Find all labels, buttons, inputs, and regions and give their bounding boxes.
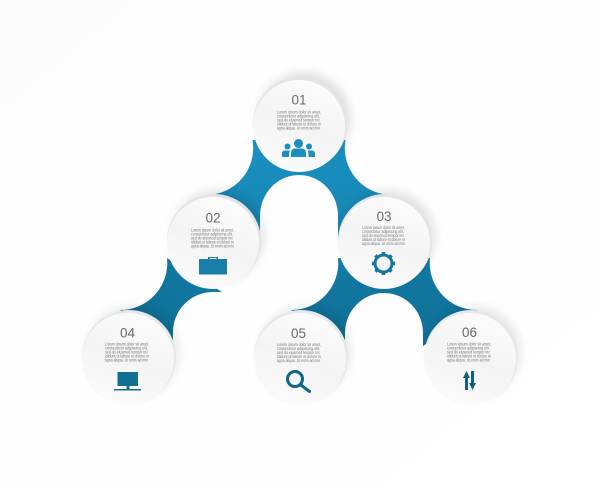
number 05: 05 — [291, 326, 306, 341]
text block 01: consectetur adipiscing elit, — [277, 114, 320, 118]
text block 03: Lorem ipsum dolor sit amet, — [362, 225, 405, 230]
connector: 03 to 05 and 06 — [291, 258, 477, 348]
text block 01 — [277, 110, 321, 130]
step 02 — [167, 190, 264, 289]
text block 02 — [191, 228, 234, 248]
text block 03: sed do eiusmod tempor inc — [362, 233, 405, 238]
step 04 — [82, 306, 179, 405]
step 06 — [424, 306, 521, 405]
icon: monitor — [114, 372, 141, 390]
text block 05: Lorem ipsum dolor sit amet, — [277, 342, 321, 347]
text block 06 — [447, 342, 491, 362]
text block 01: ididunt ut labore et dolore m — [277, 122, 321, 126]
text block 05: consectetur adipiscing elit, — [277, 346, 320, 351]
text block 04: ididunt ut labore et dolore m — [105, 354, 149, 358]
number 01: 01 — [291, 92, 307, 108]
text block 02: agna aliqua. Ut enim ad min — [191, 244, 234, 248]
text block 04 — [105, 342, 149, 362]
step 05 — [254, 306, 351, 405]
icon: gear — [372, 252, 395, 275]
text block 06: agna aliqua. Ut enim ad min — [447, 358, 490, 362]
icon: briefcase — [199, 257, 227, 274]
text block 04: agna aliqua. Ut enim ad min — [105, 358, 148, 362]
text block 03: consectetur adipiscing elit, — [362, 229, 404, 234]
text block 03 — [362, 225, 405, 246]
text block 04: sed do eiusmod tempor inc — [105, 350, 149, 354]
text block 06: Lorem ipsum dolor sit amet, — [447, 342, 491, 346]
icon: up and down arrows — [463, 371, 476, 390]
text block 02: Lorem ipsum dolor sit amet, — [191, 228, 234, 232]
text block 03: agna aliqua. Ut enim ad min — [362, 241, 405, 246]
text block 06: ididunt ut labore et dolore m — [447, 354, 491, 358]
text block 05 — [277, 342, 321, 363]
text block 06: sed do eiusmod tempor inc — [447, 350, 491, 354]
icon: people — [282, 139, 315, 157]
number 02: 02 — [205, 210, 221, 226]
connector: 02 to 04 — [120, 258, 222, 348]
step 01 — [253, 73, 350, 172]
connector: 01 to 02 and 03 — [206, 140, 392, 240]
text block 06: consectetur adipiscing elit, — [447, 346, 490, 350]
text block 02: ididunt ut labore et dolore m — [191, 240, 234, 244]
text block 04: consectetur adipiscing elit, — [105, 346, 148, 350]
text block 05: sed do eiusmod tempor inc — [277, 350, 321, 355]
text block 05: agna aliqua. Ut enim ad min — [277, 358, 320, 363]
text block 02: consectetur adipiscing elit, — [191, 232, 233, 236]
step 03 — [338, 190, 435, 289]
number 04: 04 — [120, 326, 135, 340]
text block 01: agna aliqua. Ut enim ad min — [277, 126, 320, 130]
text block 02: sed do eiusmod tempor inc — [191, 236, 234, 240]
icon: magnifier — [288, 372, 310, 392]
text block 04: Lorem ipsum dolor sit amet, — [105, 342, 149, 346]
number 03: 03 — [376, 209, 392, 224]
number 06: 06 — [462, 325, 477, 340]
text block 05: ididunt ut labore et dolore m — [277, 354, 321, 359]
text block 01: sed do eiusmod tempor inc — [277, 118, 321, 122]
text block 03: ididunt ut labore et dolore m — [362, 237, 405, 242]
text block 01: Lorem ipsum dolor sit amet, — [277, 110, 321, 114]
